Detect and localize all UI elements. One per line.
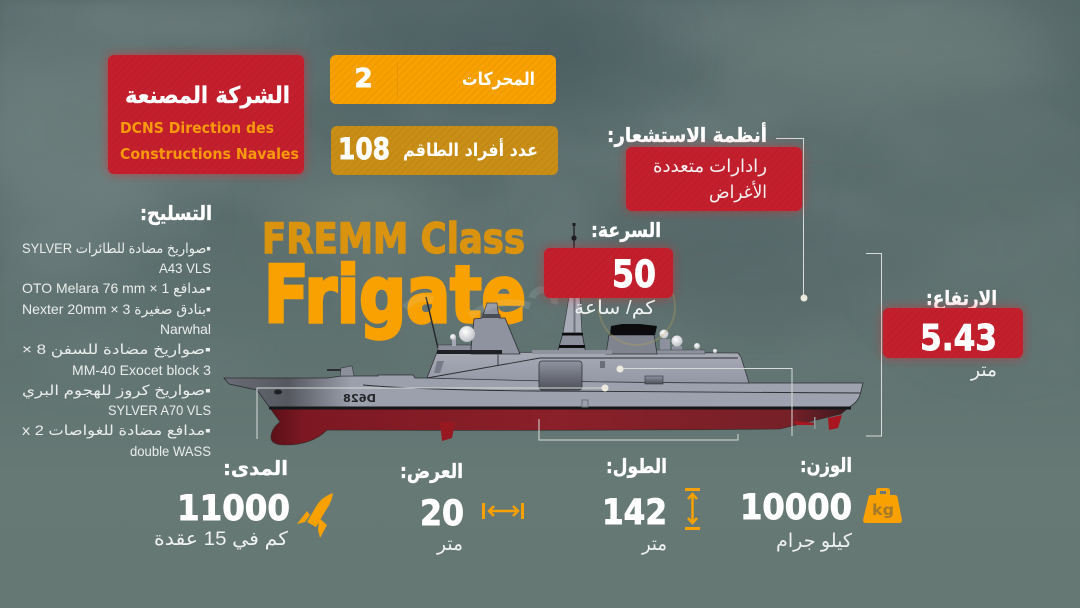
panel: armament list	[22, 201, 212, 459]
panel: sensors: الأغراض	[709, 181, 767, 203]
panel: speed: كم/ ساعة	[574, 298, 656, 319]
panel: sensors: أنظمة الاستشعار:	[607, 121, 767, 147]
panel: armament list: ▪بنادق صغيرة 3 × Nexter 20mm	[22, 301, 211, 318]
panel: engines: المحركات	[462, 69, 535, 90]
title: FREMM Class Frigate: FREMM Class	[262, 214, 525, 263]
panel: speed: 50	[612, 253, 656, 296]
title: FREMM Class Frigate	[262, 214, 526, 341]
hull lower red	[270, 408, 848, 445]
stat: width: متر	[436, 534, 463, 555]
aft mast	[557, 223, 586, 354]
panel: sensors: رادارات متعددة	[653, 156, 767, 176]
deck lines	[363, 354, 860, 393]
hangar door and hull details	[274, 361, 663, 407]
panel: armament list: Narwhal	[160, 321, 211, 337]
illustration: frigate ship	[224, 223, 863, 445]
panel: armament list: A43 VLS	[159, 260, 211, 276]
panel: crew	[331, 126, 558, 175]
background: stormy sky	[0, 0, 1080, 326]
panel: crew: 108	[338, 132, 390, 166]
stat: length: الطول:	[606, 454, 667, 478]
superstructure	[427, 352, 749, 383]
leader lines and dots	[257, 138, 882, 440]
panel: sensors	[607, 121, 802, 211]
stat: weight: 10000	[740, 488, 852, 528]
panel: armament list: ▪مدافع مضادة للغواصات 2 x	[22, 422, 211, 439]
panel: armament list: ▪صواريخ كروز للهجوم البري	[22, 382, 211, 399]
stat: range: كم في 15 عقدة	[154, 529, 289, 550]
stat: length	[602, 454, 700, 555]
panel: armament list: SYLVER A70 VLS	[108, 402, 211, 418]
panel: engines: 2	[354, 64, 373, 94]
forward antenna	[426, 297, 438, 348]
panel: manufacturer: الشركة المصنعة	[125, 83, 290, 109]
hull number: D628	[343, 392, 376, 405]
bridge, windows and pyramid mast	[434, 303, 520, 373]
panel: manufacturer	[108, 55, 304, 174]
panel: crew: عدد أفراد الطاقم	[403, 138, 538, 161]
panel: height: الارتفاع:	[926, 286, 997, 310]
radomes	[450, 326, 717, 354]
funnel block	[532, 324, 657, 354]
panel: armament list: double WASS	[130, 443, 211, 459]
gun turret	[327, 366, 354, 376]
stat: weight: الوزن:	[800, 453, 852, 477]
panel: height	[883, 286, 1023, 381]
stat: length: متر	[641, 534, 667, 555]
stat: weight: كيلو جرام	[776, 531, 853, 552]
panel: speed	[544, 218, 673, 319]
icon: rocket	[297, 493, 333, 538]
stat: width: 20	[420, 494, 464, 534]
hull upper grey	[224, 375, 863, 408]
icon: length arrow	[685, 490, 700, 528]
stat: width: العرض:	[400, 459, 463, 483]
panel: engines	[330, 55, 556, 104]
panel: armament list: ▪مدافع 1 × OTO Melara 76 mm	[22, 280, 211, 297]
stat: range	[154, 456, 333, 550]
panel: speed: السرعة:	[591, 218, 661, 242]
panel: armament list: ▪صواريخ مضادة للطائرات SYLVER	[22, 240, 211, 257]
icon: kg weight: kg	[872, 501, 894, 519]
title: FREMM Class Frigate: Frigate	[264, 251, 526, 341]
stat: length: 142	[602, 493, 667, 533]
stat: weight	[740, 453, 902, 552]
panel: armament list: ▪صواريخ مضادة للسفن 8 ×	[22, 341, 211, 358]
watermark logo	[405, 269, 675, 345]
panel: armament list: MM-40 Exocet block 3	[72, 362, 211, 378]
panel: height: متر	[970, 360, 997, 381]
stat: range: المدى:	[223, 456, 288, 480]
panel: manufacturer: DCNS Direction des	[120, 119, 274, 137]
waterline	[269, 406, 851, 410]
stat: width	[400, 459, 522, 555]
stat: range: 11000	[177, 489, 290, 529]
icon: width arrow	[484, 503, 522, 519]
panel: armament list: التسليح:	[140, 201, 212, 225]
panel: height: 5.43	[920, 318, 997, 359]
icon: kg weight	[863, 488, 902, 523]
panel: manufacturer: Constructions Navales	[120, 145, 299, 163]
rudders and propeller	[440, 415, 842, 441]
